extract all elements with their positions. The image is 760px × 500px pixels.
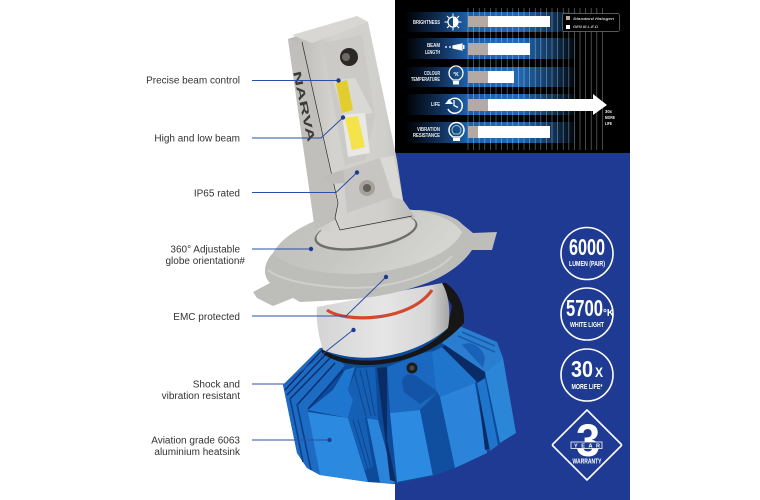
callout: shock and vibration resistant xyxy=(162,328,356,402)
badge: 3 year warranty: YEAR xyxy=(574,444,600,450)
row: life: LIFE xyxy=(431,102,441,108)
heatsink xyxy=(283,325,516,484)
badge: 5700K white light: 5700 xyxy=(566,295,603,321)
callout: adjustable globe orientation: globe orientation# xyxy=(165,256,245,267)
row: colour temperature xyxy=(411,66,514,84)
red O-ring xyxy=(327,290,432,318)
right block xyxy=(432,347,477,397)
badge: 5700K white light: °K xyxy=(603,308,615,319)
badge: 3 year warranty xyxy=(552,410,622,480)
black gasket xyxy=(322,283,464,365)
callout: EMC protected: EMC protected xyxy=(173,312,240,323)
row: life xyxy=(431,94,615,126)
front block xyxy=(308,367,355,418)
row: brightness: BRIGHTNESS xyxy=(413,20,441,26)
row: colour temperature: °K xyxy=(453,72,459,78)
callout: adjustable globe orientation xyxy=(165,244,313,267)
legend: Standard Halogen xyxy=(573,16,615,21)
badge: 6000 lumen: LUMEN (PAIR) xyxy=(569,261,605,268)
flange xyxy=(253,207,497,306)
badge: 6000 lumen: 6000 xyxy=(569,234,605,260)
callout: precise beam control: Precise beam control xyxy=(146,76,240,86)
callout: precise beam control xyxy=(146,76,341,86)
row: brightness xyxy=(413,14,550,30)
callout: shock and vibration resistant: Shock and xyxy=(193,380,240,390)
row bands xyxy=(395,12,580,143)
badge: 3 year warranty: WARRANTY xyxy=(572,458,602,466)
callout: aviation grade heatsink: Aviation grade 6063 xyxy=(151,436,240,446)
callout: adjustable globe orientation: 360° Adjustable xyxy=(170,244,240,256)
logo: NARVA: NARVA xyxy=(290,70,317,143)
badge: 30x more life: X xyxy=(595,364,604,380)
callout: IP65 rated: IP65 rated xyxy=(194,188,240,200)
outer block xyxy=(485,358,516,443)
row: colour temperature: COLOUR xyxy=(424,71,440,77)
row: life: LIFE xyxy=(605,121,612,126)
badge: 6000 lumen xyxy=(561,228,613,280)
left fins xyxy=(283,348,345,475)
legend xyxy=(562,14,620,32)
row: beam length xyxy=(425,43,530,56)
lower clip xyxy=(343,158,393,213)
row: life: MORE xyxy=(605,115,615,120)
badge: 5700K white light xyxy=(561,288,615,340)
badge: 30x more life: 30 xyxy=(571,356,593,382)
row: beam length: LENGTH xyxy=(425,50,440,56)
badge: 3 year warranty: 3 xyxy=(576,415,600,466)
badge: 30x more life xyxy=(561,349,613,401)
row: vibration resistance: VIBRATION xyxy=(417,127,440,133)
ribbed column xyxy=(348,367,378,470)
row: colour temperature: TEMPERATURE xyxy=(411,77,441,83)
centre block xyxy=(387,351,448,413)
badge: 5700K white light: WHITE LIGHT xyxy=(570,322,605,329)
upper stem xyxy=(288,16,415,232)
badge: 30x more life: MORE LIFE* xyxy=(572,384,603,391)
recess and LEDs xyxy=(333,78,373,117)
lower screw xyxy=(359,180,375,196)
callout: high and low beam: High and low beam xyxy=(154,134,240,144)
panel: blue specification column xyxy=(395,153,630,500)
cylinder body xyxy=(317,283,449,358)
callout: aviation grade heatsink xyxy=(151,436,332,458)
callout: aviation grade heatsink: aluminium heatsink xyxy=(154,447,241,458)
callout: shock and vibration resistant: vibration resistant xyxy=(162,391,240,402)
row: vibration resistance: RESISTANCE xyxy=(413,133,441,139)
row: life: 30x xyxy=(605,109,612,114)
callout: high and low beam xyxy=(154,115,345,144)
legend: GEN III L.E.D xyxy=(573,24,598,29)
row: vibration resistance xyxy=(413,123,550,141)
panel: black performance chart xyxy=(395,0,630,153)
callout: EMC protected xyxy=(173,275,388,323)
top screw xyxy=(340,48,358,66)
product: LED headlamp bulb xyxy=(253,16,516,484)
row: beam length: BEAM xyxy=(427,43,440,49)
callout: IP65 rated xyxy=(194,170,359,200)
